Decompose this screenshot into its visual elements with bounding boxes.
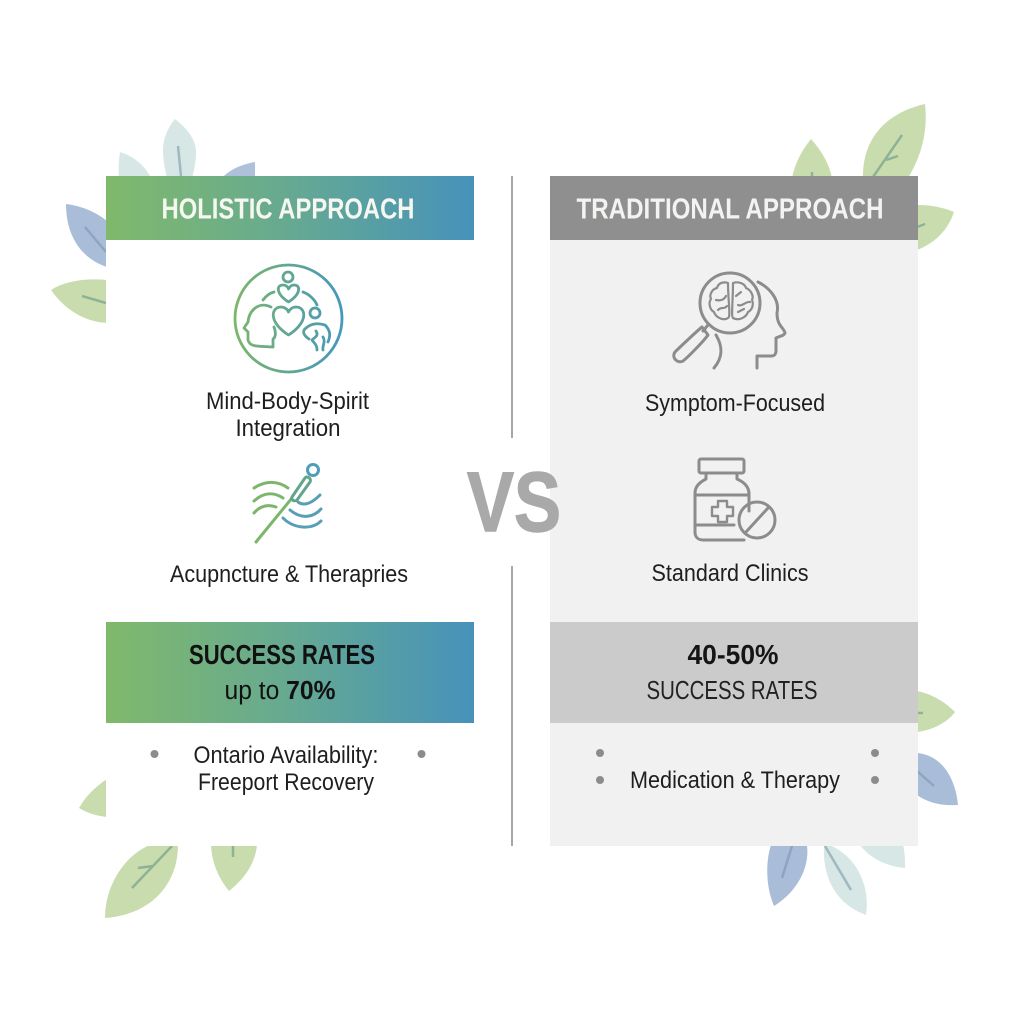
text: mind-body-spirit integration: Mind-Body-Spirit [206, 388, 369, 415]
decorative leaves: top left [51, 119, 255, 323]
text: symptom-focused: Symptom-Focused [645, 390, 825, 417]
icon: mind-body-spirit [235, 265, 342, 372]
decorative leaves: top right [792, 104, 954, 250]
heading: holistic approach [106, 176, 474, 240]
heading: traditional approach: TRADITIONAL APPROACH [576, 194, 884, 226]
icon: acupuncture needle and waves [254, 464, 321, 542]
callout: success rates: up to 70% [224, 677, 336, 705]
icon: medicine bottle and pill [695, 459, 775, 540]
text: standard clinics: Standard Clinics [652, 560, 808, 587]
divider [511, 176, 513, 846]
list: medication and therapy [596, 749, 879, 794]
callout: success rates [106, 622, 474, 723]
label: VS: VS [467, 455, 561, 549]
icon: magnifier over brain and head [674, 273, 785, 368]
decorative leaves: bottom left [79, 779, 257, 918]
list: ontario availability [150, 742, 426, 796]
text: acupuncture and therapies: Acupncture & Therapries [170, 561, 408, 588]
list: ontario availability: Freeport Recovery [198, 769, 374, 796]
heading: traditional approach [550, 176, 918, 240]
decorative leaves: bottom right [767, 691, 958, 915]
callout: 40-50% success rates [550, 622, 918, 723]
text: mind-body-spirit integration: Integration [236, 415, 340, 442]
list: ontario availability: Ontario Availability: [194, 742, 378, 769]
callout: success rates: SUCCESS RATES [189, 639, 375, 670]
list: medication and therapy: Medication & Therapy [630, 767, 840, 794]
callout: 40-50% success rates: SUCCESS RATES [646, 677, 818, 705]
panel: traditional approach [550, 176, 918, 846]
heading: holistic approach: HOLISTIC APPROACH [162, 194, 414, 226]
callout: 40-50% success rates: 40-50% [688, 639, 779, 670]
panel: holistic approach [106, 176, 474, 846]
text: mind-body-spirit integration [206, 388, 369, 442]
